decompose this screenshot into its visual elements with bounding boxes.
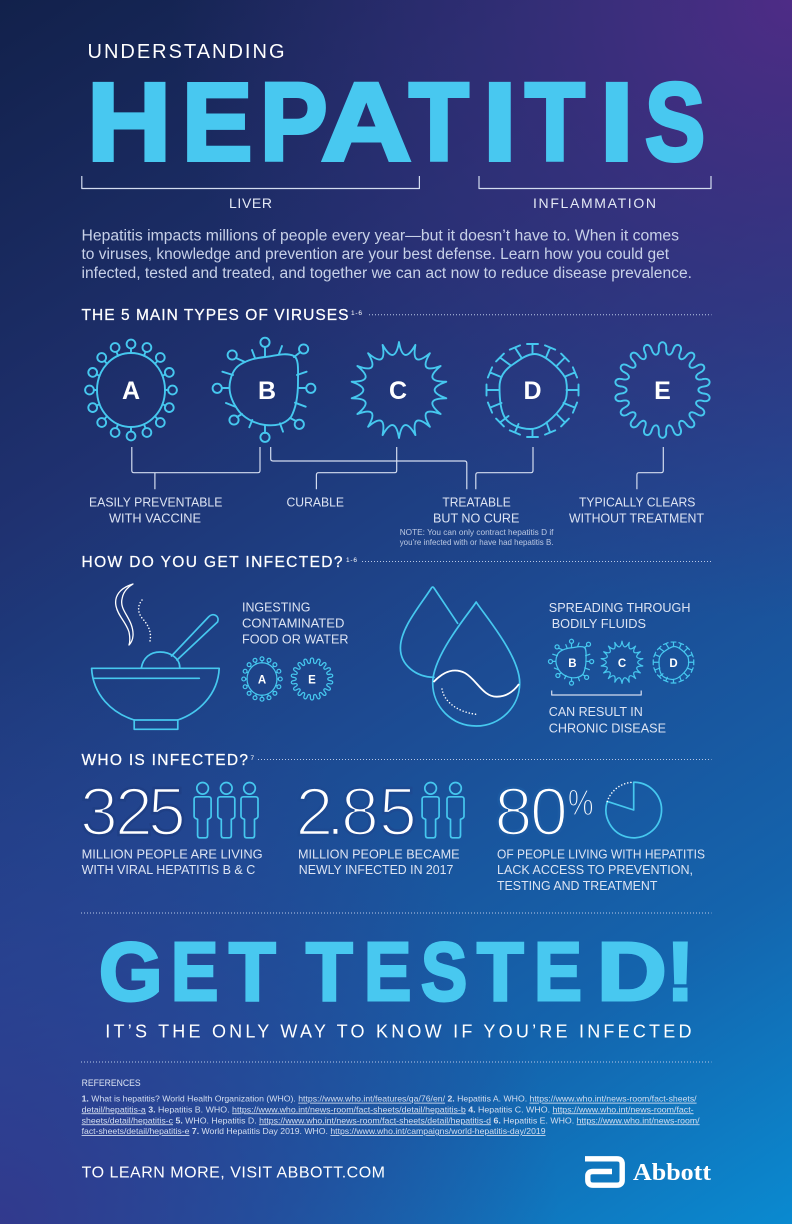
section heading: WHO IS INFECTED?: [82, 752, 248, 769]
label: liver: LIVER: [229, 195, 272, 211]
text: chronic disease: [549, 704, 666, 735]
stat: 80 percent: TESTING AND TREATMENT: [497, 878, 657, 893]
virus D: D: [523, 377, 542, 405]
label: treatable: [433, 495, 520, 525]
get tested headline: D: [597, 926, 667, 1018]
small virus B: [548, 639, 594, 685]
label: easily preventable: EASILY PREVENTABLE: [89, 495, 223, 510]
text: ingesting: INGESTING: [242, 600, 310, 615]
abbott logo: Abbott: [633, 1160, 711, 1186]
stat: 325 million: 325: [80, 774, 186, 850]
get tested headline: S: [421, 926, 467, 1018]
label: easily preventable: [89, 495, 223, 525]
stat: 325 million: WITH VIRAL HEPATITIS B & C: [82, 862, 255, 877]
footer call to action: TO LEARN MORE, VISIT ABBOTT.COM: [82, 1165, 385, 1182]
section heading: HOW DO YOU GET INFECTED?: [82, 554, 343, 571]
icon: pie: [606, 782, 662, 838]
stat: 80 percent: [494, 774, 705, 893]
text: ingesting: CONTAMINATED: [242, 616, 344, 631]
small virus D: [653, 642, 694, 683]
get tested headline: E: [171, 926, 219, 1018]
references: fact-sheets/detail/hepatitis-e 7. World Hepatitis Day 2019. WHO. https://www.who.int/campaigns/world-hepatitis-day/2019: [82, 1126, 546, 1136]
virus B: [213, 338, 315, 442]
section heading: 1-6: [346, 557, 357, 564]
note: [400, 527, 554, 547]
references: sheets/detail/hepatitis-c 5. WHO. Hepatitis D. https://www.who.int/news-room/fact-sheets/detail/hepatitis-d 6. Hepatitis E. WHO. https://www.who.int/news-room/: [82, 1115, 700, 1125]
small virus C: C: [618, 658, 626, 670]
note: you’re infected with or have had hepatitis B.: [400, 537, 554, 547]
virus E: E: [654, 377, 671, 405]
main title: T: [525, 61, 584, 184]
label: treatable: TREATABLE: [442, 495, 511, 510]
virus A: [85, 340, 177, 440]
main title: S: [645, 61, 705, 184]
text: spreading: [549, 600, 690, 631]
steam: [116, 584, 150, 645]
stat: 2.85 million: MILLION PEOPLE BECAME: [298, 846, 460, 861]
intro paragraph: infected, tested and treated, and together we can act now to reduce disease prevalence.: [82, 265, 692, 282]
main title: H: [87, 61, 171, 184]
label: typically clears: TYPICALLY CLEARS: [579, 495, 696, 510]
note: NOTE: You can only contract hepatitis D if: [400, 527, 554, 537]
stat: 2.85 million: 2.85: [296, 774, 417, 850]
connector: curable: [316, 447, 397, 489]
get tested headline: T: [306, 926, 353, 1018]
abbott logo: [585, 1159, 711, 1186]
call to action: [81, 913, 712, 1062]
small virus E: E: [308, 674, 316, 686]
get tested headline: E: [534, 926, 582, 1018]
get tested headline: [98, 935, 692, 1007]
section heading: 7: [250, 755, 254, 762]
label: inflammation: INFLAMMATION: [533, 195, 656, 211]
get tested headline: !: [667, 926, 694, 1018]
bracket: chronic: [552, 690, 641, 695]
connector: preventable: [132, 447, 260, 489]
main title: E: [182, 61, 252, 184]
stat: 80 percent: 80: [494, 774, 568, 850]
references: detail/hepatitis-a 3. Hepatitis B. WHO. https://www.who.int/news-room/fact-sheets/detail/hepatitis-b 4. Hepatitis C. WHO. https://www.who.int/news-room/fact-: [82, 1104, 694, 1114]
virus A: A: [122, 377, 140, 405]
virus C: C: [389, 377, 407, 405]
connector: treatable from B: [271, 447, 467, 489]
connector: treatable from D: [476, 447, 533, 489]
text: spreading: SPREADING THROUGH: [549, 600, 690, 615]
main title: I: [600, 61, 633, 184]
small virus A: A: [258, 674, 266, 686]
small virus A: [242, 657, 282, 701]
text: ingesting: [242, 600, 348, 647]
section: types of viruses: [82, 307, 712, 547]
section: how infected: [82, 554, 712, 735]
label: curable: CURABLE: [286, 495, 344, 510]
main title: P: [260, 61, 328, 184]
subheading: IT’S THE ONLY WAY TO KNOW IF YOU’RE INFECTED: [105, 1021, 692, 1041]
get tested headline: E: [364, 926, 411, 1018]
main title: A: [321, 61, 411, 184]
get tested headline: T: [477, 926, 524, 1018]
section heading: [82, 307, 712, 324]
main title: I: [483, 61, 516, 184]
small virus E: [290, 658, 334, 700]
section heading: [82, 554, 712, 571]
text: ingesting: FOOD OR WATER: [242, 632, 348, 647]
bracket: inflammation: [479, 176, 711, 188]
intro paragraph: [82, 228, 692, 282]
text: spreading: BODILY FLUIDS: [552, 616, 646, 631]
icon: drops: [400, 587, 520, 726]
virus D: [486, 344, 578, 437]
references: [82, 1078, 700, 1136]
text: chronic disease: CHRONIC DISEASE: [549, 720, 666, 735]
small virus B: B: [568, 658, 577, 670]
virus E: [614, 341, 711, 439]
stat: 80 percent: %: [568, 782, 594, 823]
stat: 325 million: MILLION PEOPLE ARE LIVING: [82, 846, 263, 861]
section heading: THE 5 MAIN TYPES OF VIRUSES: [82, 307, 348, 324]
stat: 325 million: [80, 774, 263, 877]
small virus D: D: [669, 658, 678, 670]
label: typically clears: WITHOUT TREATMENT: [569, 510, 704, 525]
text: chronic disease: CAN RESULT IN: [549, 704, 643, 719]
get tested headline: G: [99, 926, 162, 1018]
label: easily preventable: WITH VACCINE: [109, 510, 201, 525]
stat: 80 percent: LACK ACCESS TO PREVENTION,: [497, 862, 693, 877]
references: REFERENCES: [82, 1078, 141, 1089]
main title: T: [409, 61, 468, 184]
references: 1. What is hepatitis? World Health Organization (WHO). https://www.who.int/features/qa/76/en/ 2. Hepatitis A. WHO. https://www.who.int/news-room/fact-sheets/: [82, 1094, 697, 1104]
intro paragraph: to viruses, knowledge and prevention are your best defense. Learn how you could get: [82, 246, 670, 263]
get tested headline: T: [229, 926, 276, 1018]
connector: clears: [637, 447, 663, 489]
section heading: 1-6: [351, 310, 362, 317]
stat: 2.85 million: NEWLY INFECTED IN 2017: [299, 862, 453, 877]
main title: [88, 75, 706, 169]
stat: 80 percent: OF PEOPLE LIVING WITH HEPATITIS: [497, 846, 705, 861]
virus C: [352, 342, 446, 438]
intro paragraph: Hepatitis impacts millions of people every year—but it doesn’t have to. When it comes: [82, 228, 679, 244]
stat: 2.85 million: [296, 774, 464, 877]
section heading: [82, 752, 712, 769]
bracket: liver: [82, 176, 419, 188]
virus B: B: [258, 377, 276, 405]
pre-title: UNDERSTANDING: [88, 41, 284, 63]
section: who is infected: [80, 752, 712, 893]
small virus C: [601, 641, 643, 683]
bowl: [92, 615, 219, 729]
header: [82, 41, 711, 211]
icon: bowl and steam: [92, 584, 219, 729]
label: typically clears: [569, 495, 704, 525]
label: treatable: BUT NO CURE: [433, 510, 520, 525]
